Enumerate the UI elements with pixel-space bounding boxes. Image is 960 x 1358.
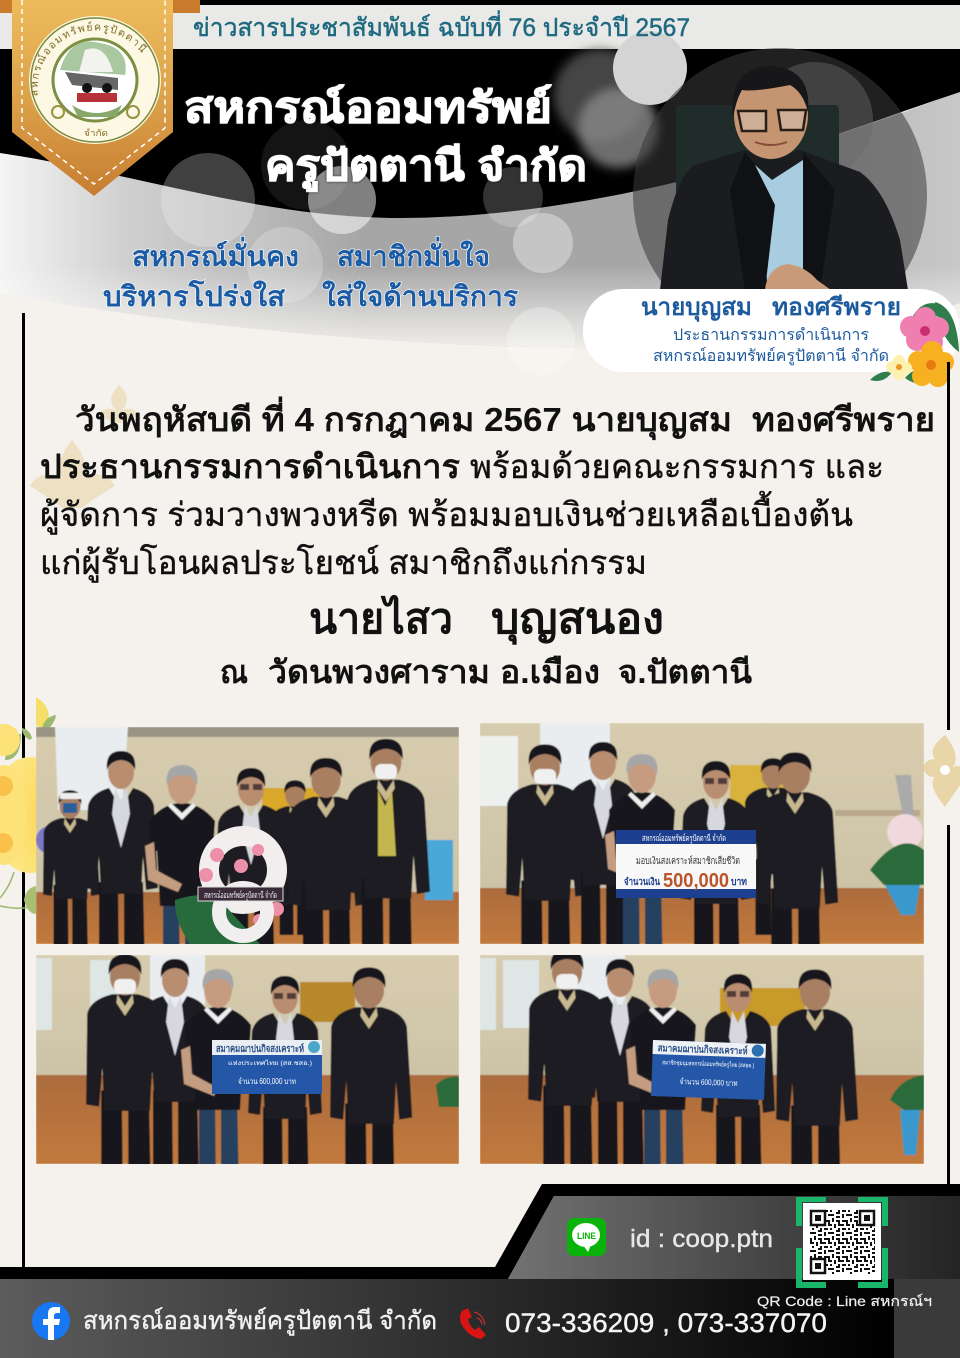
600,000 baht board [212, 1040, 322, 1094]
body text: วันพฤหัสบดี ที่ 4 กรกฎาคม 2567 นายบุญสม [75, 396, 732, 441]
icon: telephone [460, 1308, 486, 1339]
portrait of the chairman [633, 48, 927, 289]
title [184, 84, 587, 192]
Facebook page name: สหกรณ์ออมทรัพย์ครูปัตตานี จำกัด [83, 1307, 437, 1336]
photo: presenting 600,000 baht board [36, 955, 459, 1164]
deceased member name: บุญสนอง [491, 595, 664, 645]
body text: แก่ผู้รับโอนผลประโยชน์ สมาชิกถึงแก่กรรม [40, 544, 647, 583]
footer lower panel [0, 1279, 960, 1358]
600,000 baht board: สมาคมฌาปนกิจสงเคราะห์ [216, 1043, 304, 1055]
footer upper panel [0, 1184, 960, 1279]
title: สหกรณ์ออมทรัพย์ [184, 84, 552, 131]
logo seal: จำกัด [84, 128, 108, 138]
500,000 baht board: สหกรณ์ออมทรัพย์ครูปัตตานี จำกัด [642, 832, 726, 844]
newsletter issue heading: ข่าวสารประชาสัมพันธ์ ฉบับที่ 76 ประจำปี 2567 [193, 10, 690, 42]
deceased member name [309, 594, 664, 645]
500,000 baht board: บาท [731, 877, 747, 888]
body text: ผู้จัดการ ร่วมวางพวงหรีด พร้อมมอบเงินช่วยเหลือเบื้องต้น [40, 491, 853, 535]
venue: ณ [220, 654, 248, 690]
header background with curved bands [0, 0, 960, 348]
title: ครูปัตตานี จำกัด [265, 142, 587, 192]
decorative gold ornaments [30, 385, 138, 508]
venue: วัดนพวงศาราม [268, 654, 490, 690]
wreath: สหกรณ์ออมทรัพย์ครูปัตตานี จำกัด [204, 889, 277, 901]
deceased member name: นายไสว [309, 594, 453, 642]
photo: laying wreath [36, 727, 459, 944]
slogans [103, 236, 518, 312]
photo: presenting 500,000 baht board [480, 723, 924, 944]
venue: จ.ปัตตานี [618, 654, 752, 690]
photo: second 600,000 baht board [480, 955, 924, 1164]
icon: LINE: LINE [577, 1231, 596, 1241]
body text: ทองศรีพราย [752, 401, 935, 438]
venue: อ.เมือง [500, 654, 600, 690]
tilted board: จำนวน 600,000 บาท [679, 1077, 738, 1088]
QR code [796, 1197, 888, 1288]
600,000 baht board: แห่งประเทศไทย (สส.ชสอ.) [228, 1059, 312, 1067]
500,000 baht board: 500,000 [663, 870, 729, 892]
slogans: ใส่ใจด้านบริการ [322, 280, 518, 312]
slogans: สหกรณ์มั่นคง [132, 236, 299, 272]
venue [220, 654, 752, 690]
500,000 baht board: มอบเงินสงเคราะห์สมาชิกเสียชีวิต [636, 855, 740, 867]
wreath [175, 836, 284, 944]
name plate: สหกรณ์ออมทรัพย์ครูปัตตานี จำกัด [653, 346, 889, 366]
tilted board: สมาชิกชุมนุมสหกรณ์ออมทรัพย์ครูไทย (สสอค.) [662, 1058, 754, 1070]
body text: ประธานกรรมการดำเนินการ [40, 448, 460, 485]
slogans: สมาชิกมั่นใจ [337, 236, 490, 272]
tilted board: สมาคมฌาปนกิจสงเคราะห์ [658, 1042, 748, 1057]
name plate: ทองศรีพราย [772, 294, 901, 321]
logo seal: สหกรณ์ออมทรัพย์ครูปัตตานี [31, 21, 148, 96]
name plate: นายบุญสม [641, 294, 752, 323]
ribbon with cooperative logo [0, 0, 200, 196]
name plate [583, 289, 960, 372]
icon: Facebook [32, 1302, 70, 1340]
LINE id: id : coop.ptn [630, 1225, 773, 1253]
logo seal [29, 16, 161, 144]
body text: พร้อมด้วยคณะกรรมการ และ [470, 448, 884, 485]
yellow flower decoration left [0, 697, 70, 914]
slogans: บริหารโปร่งใส [103, 279, 286, 312]
phone numbers: 073-336209 , 073-337070 [505, 1308, 827, 1338]
500,000 baht board: จำนวนเงิน [624, 876, 660, 888]
body frame lines [22, 313, 950, 1267]
600,000 baht board: จำนวน 600,000 บาท [238, 1077, 296, 1086]
tilted board [651, 1040, 766, 1100]
name plate: ประธานกรรมการดำเนินการ [673, 327, 869, 344]
icon: LINE [567, 1218, 606, 1256]
right gold ornament [923, 735, 960, 807]
QR caption: QR Code : Line สหกรณ์ฯ [757, 1293, 932, 1309]
tropical flowers [870, 302, 959, 387]
body text [40, 396, 935, 583]
500,000 baht board [616, 830, 756, 898]
decorative bubbles [161, 31, 687, 375]
